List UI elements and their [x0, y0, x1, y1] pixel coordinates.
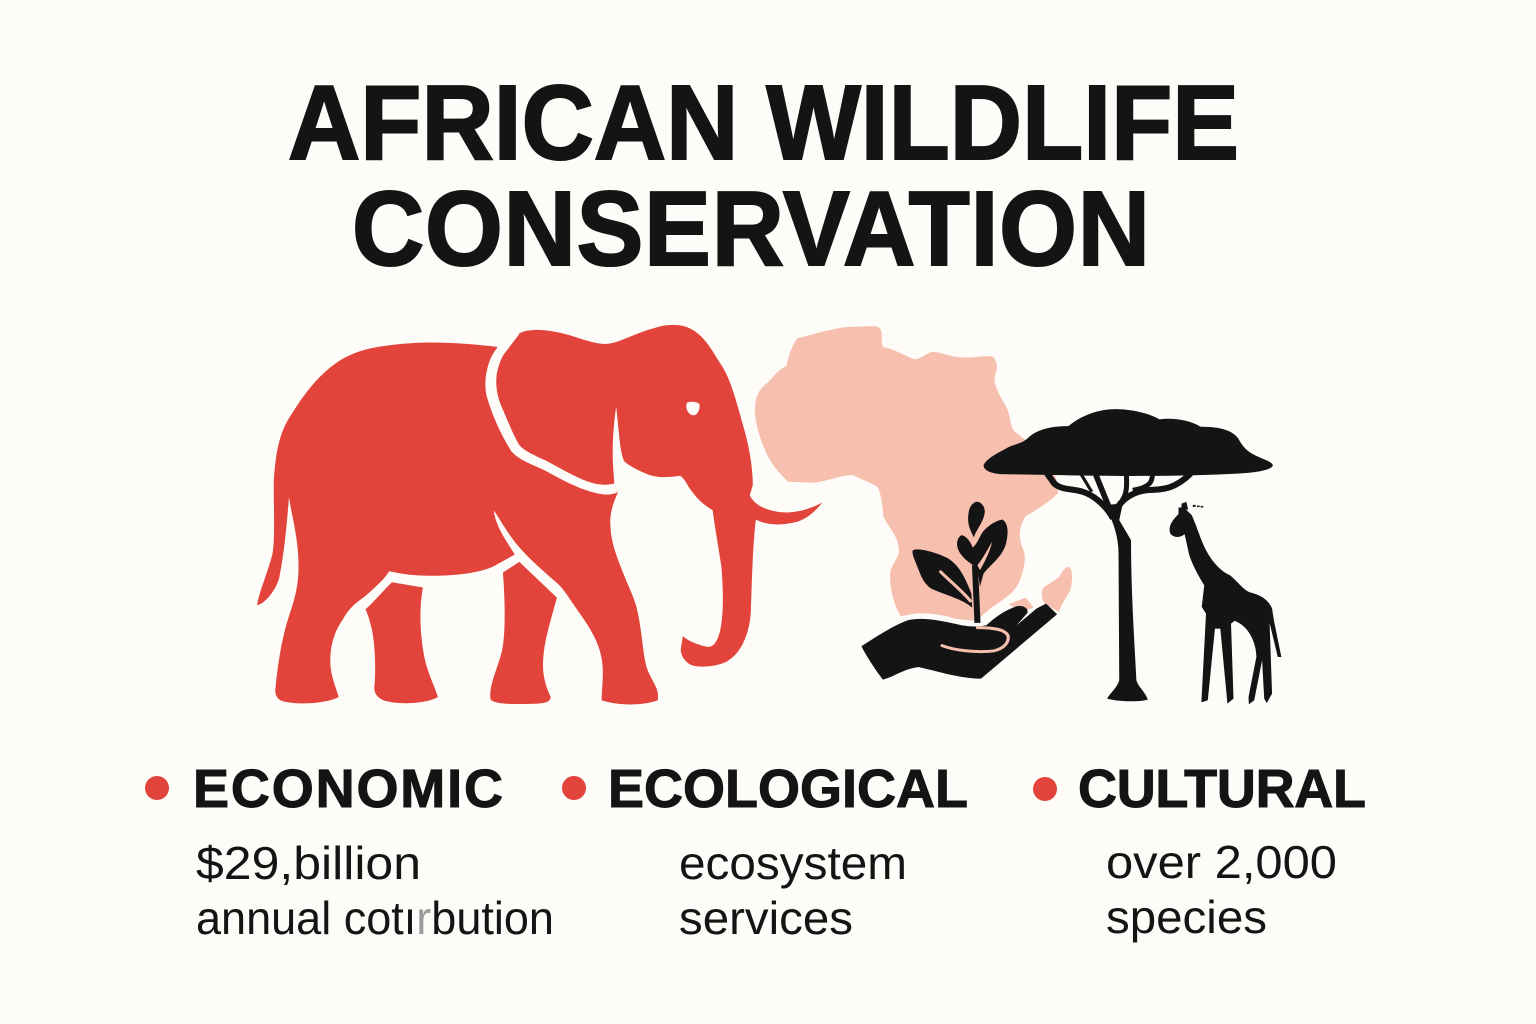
icon: red elephant [257, 325, 822, 704]
heading: economic: ECONOMIC [193, 759, 503, 819]
text: ecological detail: services [679, 892, 853, 944]
elephant body [257, 325, 822, 704]
icon: open hand [861, 604, 1057, 680]
text: economic detail [196, 837, 554, 944]
icon: acacia tree [984, 409, 1273, 701]
bullet: ecological [562, 776, 586, 800]
text: cultural detail: species [1106, 891, 1267, 943]
icon: giraffe [1170, 502, 1281, 704]
text: economic detail: $29,billion [196, 837, 421, 889]
bullet: economic [145, 776, 169, 800]
icon: Africa map [755, 326, 1072, 621]
text: cultural detail [1106, 836, 1337, 943]
text: ecological detail [679, 837, 907, 944]
title [288, 63, 1239, 288]
bullet: cultural [1033, 777, 1057, 801]
elephant ear gap [485, 333, 618, 495]
title: AFRICAN WILDLIFE [288, 63, 1239, 182]
icon: seedling [912, 502, 1008, 623]
heading: ecological: ECOLOGICAL [608, 759, 968, 819]
legend: ecological [562, 759, 968, 944]
elephant eye [686, 402, 700, 415]
legend: economic [145, 759, 554, 944]
elephant far front leg [490, 562, 557, 704]
legend: cultural [1033, 759, 1366, 943]
text: economic detail: annual cotırbution [196, 892, 554, 944]
text: ecological detail: ecosystem [679, 837, 907, 889]
title: CONSERVATION [352, 169, 1150, 288]
heading: cultural: CULTURAL [1078, 759, 1366, 819]
icon: tree, giraffe, hand and plant [861, 409, 1281, 704]
text: cultural detail: over 2,000 [1106, 836, 1337, 888]
elephant far hind leg [366, 582, 438, 703]
